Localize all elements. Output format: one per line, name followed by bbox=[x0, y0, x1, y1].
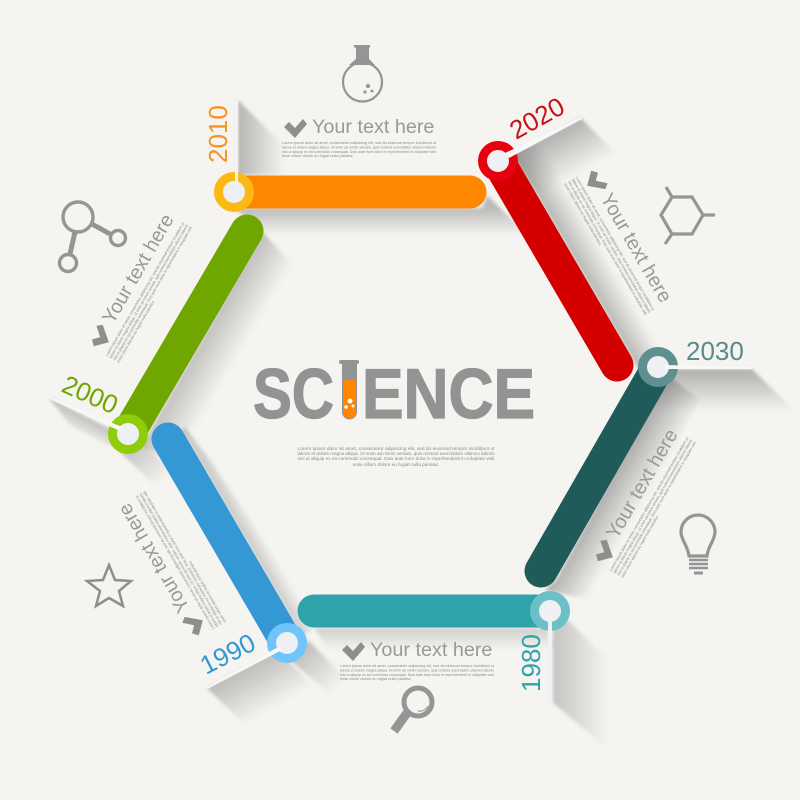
pin: 1990 bbox=[207, 646, 282, 689]
node: 2010 ring bbox=[218, 176, 250, 208]
heading: Your text here bbox=[114, 499, 194, 616]
title: SCIENCE: ENCE bbox=[362, 354, 535, 433]
center description: Lorem ipsum dolor sit amet, consectetur adipiscing elit, sed do eiusmod tempor incididunt ut bbox=[298, 446, 495, 451]
node: 2020 ring bbox=[482, 146, 514, 176]
panel: 2030 segment bbox=[541, 336, 752, 571]
year: 2020: 2020 bbox=[504, 91, 570, 145]
icon: molecule cluster bbox=[60, 202, 126, 272]
center description: nisi ut aliquip ex ea commodo consequat. Duis aute irure dolor in reprehenderit in voluptate velit bbox=[298, 456, 495, 461]
lorem: labore et dolore magna aliqua. Ut enim ad minim veniam, quis nostrud exercitation ullamco laboris bbox=[108, 223, 189, 359]
panel: 2020 segment bbox=[482, 91, 617, 365]
icon: magnifier bbox=[394, 688, 432, 731]
node: 1980 ring bbox=[534, 596, 566, 626]
center description: esse cillum dolore eu fugiat nulla pariatur. bbox=[353, 462, 439, 467]
icon: check bbox=[582, 167, 610, 196]
lorem: esse cillum dolore eu fugiat nulla pariatur. bbox=[619, 514, 660, 579]
lorem: esse cillum dolore eu fugiat nulla pariatur. bbox=[187, 559, 227, 624]
lorem: labore et dolore magna aliqua. Ut enim ad minim veniam, quis nostrud exercitation ullamco laboris bbox=[612, 438, 693, 574]
icon: check bbox=[87, 322, 115, 352]
pin: 1980 bbox=[548, 618, 552, 703]
lorem: esse cillum dolore eu fugiat nulla pariatur. bbox=[115, 299, 156, 364]
node: 1990 ring bbox=[272, 628, 302, 658]
icon: lightbulb bbox=[681, 515, 715, 573]
panel: 2000 segment bbox=[48, 231, 247, 450]
icon: star bbox=[87, 565, 131, 606]
lorem: labore et dolore magna aliqua. Ut enim ad minim veniam, quis nostrud exercitation ullamco laboris bbox=[282, 144, 436, 149]
text block: 2030 rotated bbox=[587, 423, 701, 579]
center description bbox=[298, 446, 495, 467]
lorem: labore et dolore magna aliqua. Ut enim ad minim veniam, quis nostrud exercitation ullamco laboris bbox=[571, 178, 652, 314]
panel: 1990 segment bbox=[168, 439, 302, 689]
heading: Your text here bbox=[602, 425, 683, 542]
lorem: labore et dolore magna aliqua. Ut enim ad minim veniam, quis nostrud exercitation ullamco laboris bbox=[340, 667, 494, 672]
lorem: esse cillum dolore eu fugiat nulla pariatur. bbox=[340, 676, 412, 681]
bar: dark teal bbox=[541, 367, 658, 571]
bar: red bbox=[498, 161, 617, 365]
bar: green bbox=[128, 231, 247, 434]
panel: 1980 segment bbox=[314, 596, 566, 703]
icon: test tube letter I bbox=[339, 360, 359, 420]
text block: bottom 1980 bbox=[340, 639, 495, 681]
year: 2030: 2030 bbox=[686, 336, 744, 366]
icon: check bbox=[180, 610, 208, 639]
lorem: nisi ut aliquip ex ea commodo consequat. Duis aute irure dolor in reprehenderit in voluptate velit bbox=[616, 440, 697, 576]
heading: Your text here bbox=[98, 210, 179, 328]
text block: 2000 rotated bbox=[83, 208, 197, 364]
lorem: Lorem ipsum dolor sit amet, consectetur adipiscing elit, sed do eiusmod tempor incididunt ut bbox=[340, 663, 495, 668]
lorem: nisi ut aliquip ex ea commodo consequat. Duis aute irure dolor in reprehenderit in voluptate velit bbox=[340, 672, 495, 677]
lorem: Lorem ipsum dolor sit amet, consectetur adipiscing elit, sed do eiusmod tempor incididunt ut bbox=[608, 435, 690, 572]
bar: orange bbox=[234, 176, 470, 208]
icon: check bbox=[591, 537, 619, 567]
year: 1980: 1980 bbox=[516, 634, 546, 692]
pin: 2000 bbox=[48, 396, 122, 431]
text block: top 2010 bbox=[282, 116, 437, 158]
lorem: Lorem ipsum dolor sit amet, consectetur adipiscing elit, sed do eiusmod tempor incididunt ut bbox=[282, 140, 437, 145]
panel: 2010 segment bbox=[203, 100, 470, 208]
pin: 2010 bbox=[235, 100, 238, 184]
icon: flask bbox=[343, 45, 382, 102]
lorem: Lorem ipsum dolor sit amet, consectetur adipiscing elit, sed do eiusmod tempor incididunt ut bbox=[134, 494, 215, 630]
icon: hexagon molecule bbox=[661, 187, 715, 244]
lorem: esse cillum dolore eu fugiat nulla pariatur. bbox=[563, 182, 603, 247]
lorem: labore et dolore magna aliqua. Ut enim ad minim veniam, quis nostrud exercitation ullamco laboris bbox=[138, 492, 219, 628]
node: 2000 ring bbox=[112, 418, 144, 450]
title: SCIENCE bbox=[253, 354, 535, 433]
lorem: nisi ut aliquip ex ea commodo consequat. Duis aute irure dolor in reprehenderit in voluptate velit bbox=[567, 180, 649, 317]
lorem: esse cillum dolore eu fugiat nulla pariatur. bbox=[282, 153, 354, 158]
lorem: nisi ut aliquip ex ea commodo consequat. Duis aute irure dolor in reprehenderit in voluptate velit bbox=[141, 489, 223, 626]
title: SCIENCE: SC bbox=[253, 354, 334, 433]
lorem: nisi ut aliquip ex ea commodo consequat. Duis aute irure dolor in reprehenderit in voluptate velit bbox=[282, 149, 437, 154]
year: 2010: 2010 bbox=[203, 105, 233, 163]
lorem bbox=[340, 663, 495, 681]
pin: 2030 bbox=[665, 365, 752, 369]
pin: 2020 bbox=[505, 117, 582, 158]
year: 1990: 1990 bbox=[195, 627, 260, 680]
center description: labore et dolore magna aliqua. Ut enim ad minim veniam, quis nostrud exercitation ullamco laboris bbox=[298, 451, 495, 456]
long shadows bbox=[48, 100, 800, 752]
icon: check bbox=[284, 119, 307, 138]
heading: Your text here bbox=[370, 639, 492, 661]
text block: 1990 rotated bbox=[113, 487, 227, 642]
heading: Your text here bbox=[312, 116, 434, 138]
lorem bbox=[282, 140, 437, 158]
lorem: nisi ut aliquip ex ea commodo consequat. Duis aute irure dolor in reprehenderit in voluptate velit bbox=[112, 225, 193, 361]
lorem: Lorem ipsum dolor sit amet, consectetur adipiscing elit, sed do eiusmod tempor incididunt ut bbox=[104, 220, 186, 357]
bar: teal bbox=[314, 594, 550, 628]
text block: 2020 rotated bbox=[563, 164, 677, 319]
year: 2000: 2000 bbox=[58, 369, 123, 420]
node: 2030 ring bbox=[642, 352, 674, 382]
icon: check bbox=[342, 642, 365, 661]
heading: Your text here bbox=[596, 190, 676, 307]
lorem: Lorem ipsum dolor sit amet, consectetur adipiscing elit, sed do eiusmod tempor incididunt ut bbox=[575, 176, 656, 312]
bar: blue bbox=[168, 439, 287, 643]
